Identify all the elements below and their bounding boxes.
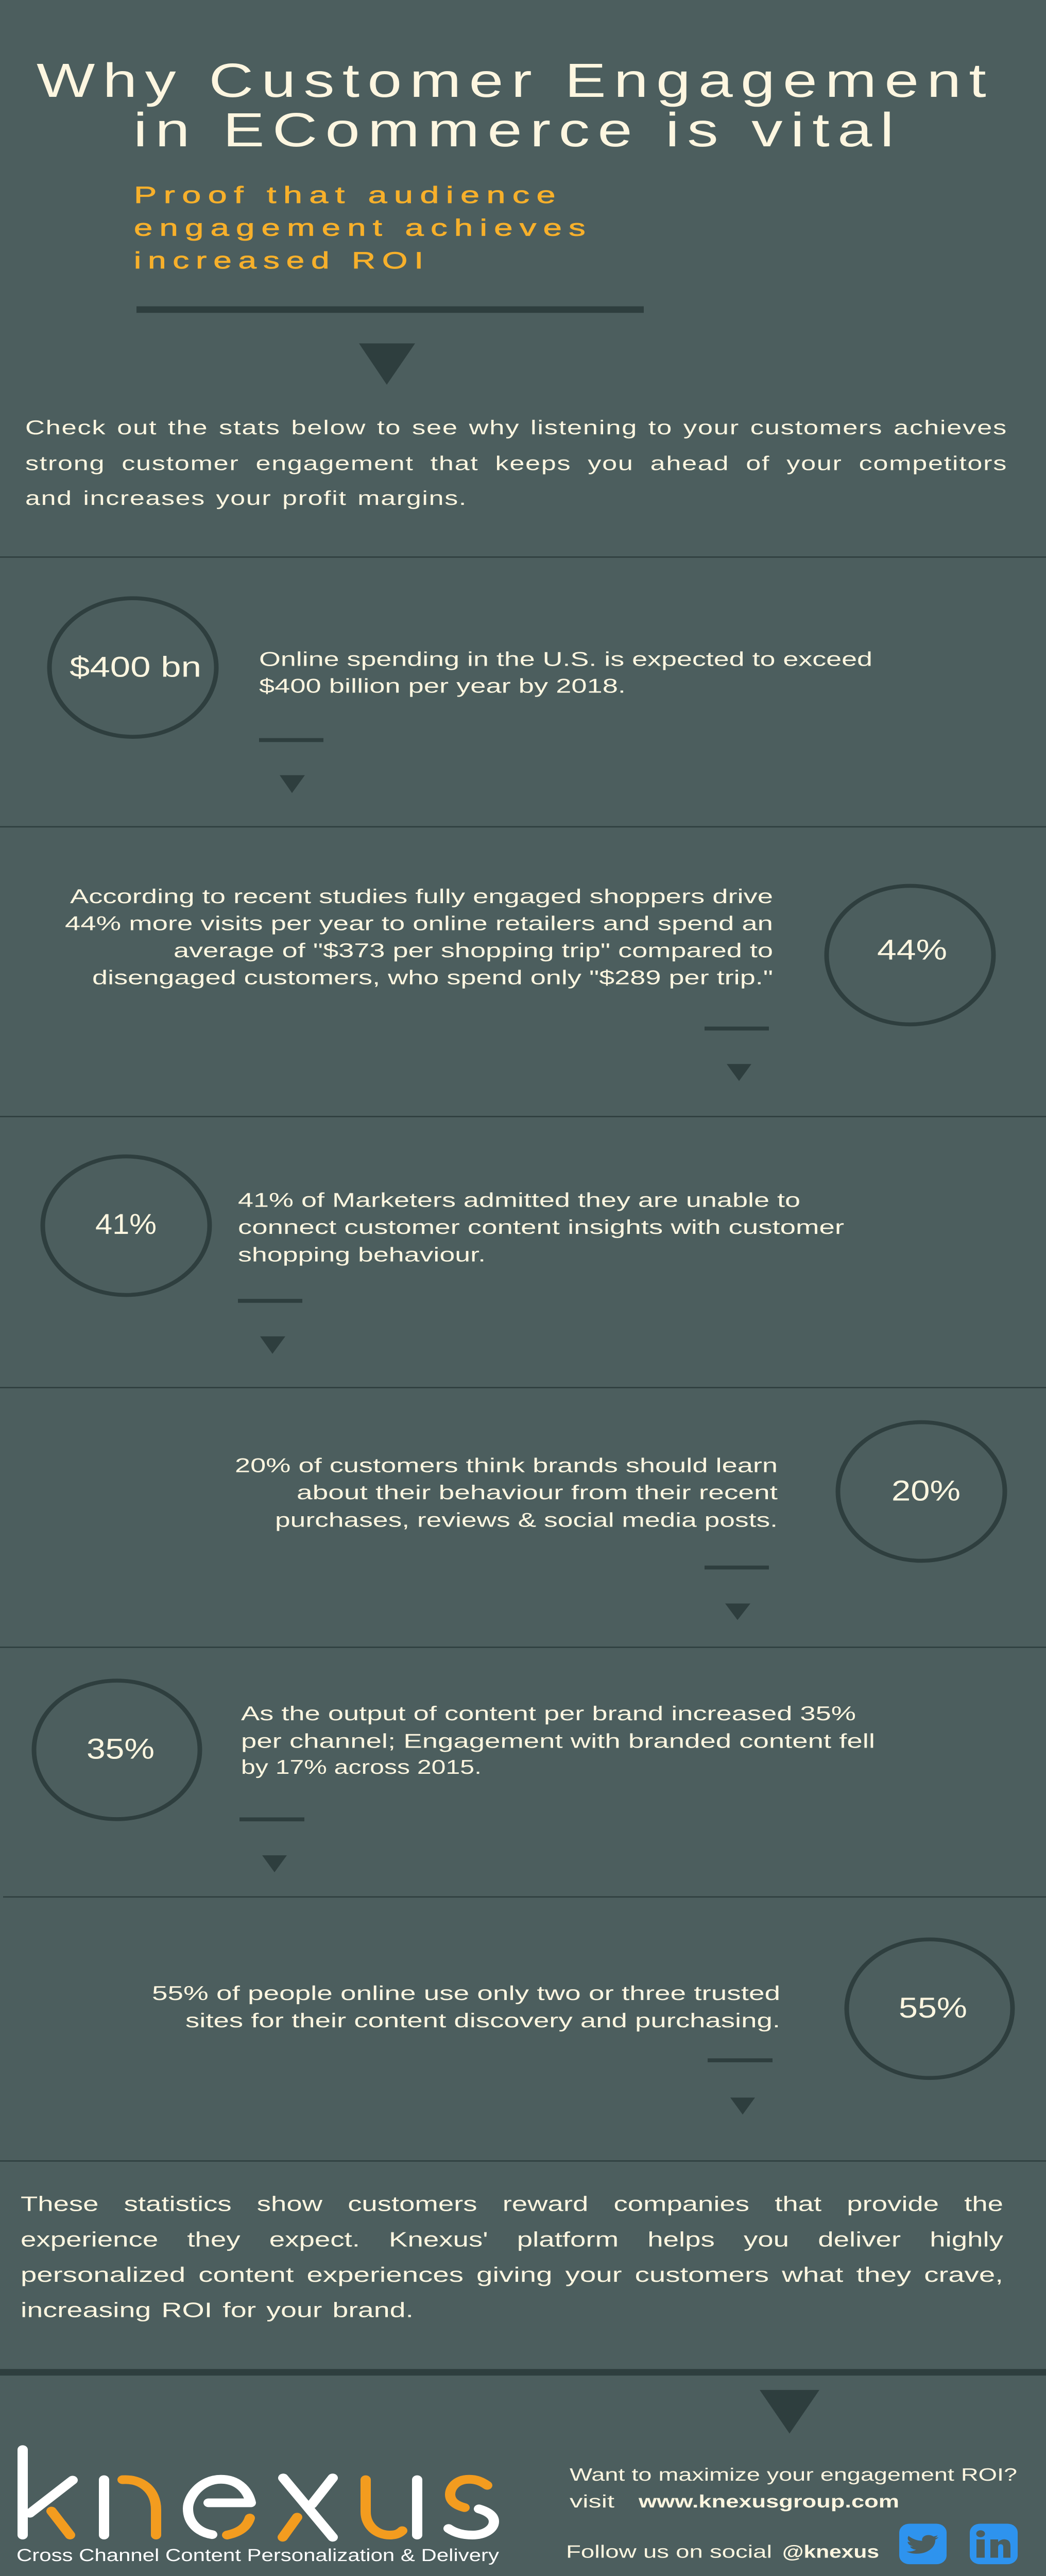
text: brands should learn: 20% of customers think brands should learn	[235, 1454, 778, 1477]
header divider bar	[136, 307, 644, 313]
dash	[239, 1818, 304, 1821]
logo tagline: Cross Channel Content Personalization & Delivery	[16, 2546, 499, 2565]
logo letter u	[366, 2480, 417, 2535]
arrow: down	[262, 1855, 287, 1872]
closing text block: personalized content experiences giving your customers what they crave,	[21, 2264, 1003, 2286]
text: marketers	[238, 1189, 844, 1266]
dash	[259, 738, 323, 742]
circle: 20%	[838, 1422, 1005, 1561]
call to action text: www.knexusgroup.com	[638, 2492, 899, 2512]
text: output of content: by 17% across 2015.	[241, 1755, 482, 1778]
subtitle: engagement achieves	[134, 215, 592, 241]
panel: stat 41%	[43, 1157, 844, 1354]
logo letter n	[104, 2480, 156, 2535]
arrow: down	[260, 1336, 285, 1354]
panel: stat 44%	[65, 885, 993, 1081]
intro text block	[25, 416, 1007, 510]
dash	[705, 1566, 769, 1569]
arrow: down	[725, 1603, 750, 1620]
intro text block: strong customer engagement that keeps you ahead of your competitors	[25, 452, 1007, 474]
logo letter s	[449, 2479, 494, 2535]
arrow: footer triangle	[760, 2390, 819, 2433]
logo letter x	[283, 2478, 333, 2537]
subtitle	[134, 182, 592, 274]
call to action text: visit	[570, 2492, 615, 2512]
text: engaged shoppers: disengaged customers, who spend only "$289 per trip."	[92, 966, 773, 989]
text: trusted sites: sites for their content discovery and purchasing.	[185, 2009, 780, 2032]
dash	[708, 2058, 773, 2062]
panel: stat 55%	[152, 1939, 1013, 2114]
text: brands should learn: about their behaviour from their recent	[297, 1481, 778, 1504]
text: marketers: shopping behaviour.	[238, 1243, 486, 1266]
text: online spending: $400 billion per year by 2018.	[259, 674, 626, 697]
title: in ECommerce is vital	[133, 103, 902, 157]
icon: twitter	[899, 2524, 947, 2564]
text: marketers: connect customer content insights with customer	[238, 1216, 844, 1239]
footer divider bar	[0, 2369, 1046, 2376]
closing text block: These statistics show customers reward companies that provide the	[21, 2193, 1003, 2216]
arrow: down	[280, 775, 305, 793]
call to action text	[570, 2464, 1017, 2512]
closing text block	[21, 2193, 1003, 2322]
arrow: header triangle	[359, 343, 415, 385]
closing text block: increasing ROI for your brand.	[21, 2299, 414, 2322]
subtitle: increased ROI	[134, 247, 430, 274]
text: engaged shoppers: 44% more visits per year to online retailers and spend an	[65, 912, 773, 935]
intro text block: and increases your profit margins.	[25, 487, 467, 510]
circle: 44%	[827, 886, 993, 1024]
text: engaged shoppers: average of "$373 per shopping trip" compared to	[174, 939, 773, 962]
text: output of content	[241, 1702, 875, 1778]
panel: stat $400 bn	[49, 598, 872, 793]
call to action text: Want to maximize your engagement ROI?	[570, 2464, 1017, 2484]
subtitle: Proof that audience	[134, 182, 562, 208]
social follow text: @knexus	[782, 2541, 879, 2562]
arrow: down	[727, 1064, 751, 1081]
logo letter k	[23, 2450, 73, 2535]
social follow text	[566, 2541, 879, 2562]
closing text block: experience they expect. Knexus' platform helps you deliver highly	[21, 2228, 1003, 2251]
logo letter e	[188, 2479, 251, 2535]
circle: 41%: 41%	[95, 1208, 157, 1240]
social follow text: Follow us on social	[566, 2541, 772, 2562]
dash	[705, 1027, 769, 1030]
circle: 55%: 55%	[899, 1991, 967, 2024]
panel: stat 20%	[235, 1422, 1005, 1620]
circle: 55%	[847, 1939, 1013, 2078]
text: output of content: per channel; Engagement with branded content fell	[241, 1730, 875, 1752]
text: online spending: Online spending in the U.S. is expected to exceed	[259, 648, 872, 670]
text: trusted sites: 55% of people online use only two or three trusted	[152, 1981, 780, 2004]
title: Why Customer Engagement	[37, 54, 994, 107]
circle: $400 bn: $400 bn	[70, 651, 201, 683]
intro text block: Check out the stats below to see why listening to your customers achieves	[25, 416, 1007, 439]
arrow: down	[730, 2097, 755, 2114]
text: output of content: As the output of content per brand increased 35%	[241, 1702, 856, 1724]
dash	[238, 1299, 302, 1303]
circle: 20%: 20%	[891, 1475, 961, 1507]
circle: 41%	[43, 1157, 210, 1295]
text: trusted sites	[152, 1981, 780, 2032]
logo: knexus	[16, 2450, 499, 2565]
circle: 35%	[34, 1681, 200, 1819]
text: marketers: 41% of Marketers admitted they are unable to	[238, 1189, 800, 1211]
circle: 44%: 44%	[877, 934, 947, 965]
text: engaged shoppers	[65, 885, 773, 989]
circle: 35%: 35%	[87, 1733, 155, 1765]
text: online spending	[259, 648, 872, 697]
text: engaged shoppers: According to recent studies fully engaged shoppers drive	[70, 885, 773, 908]
panel: stat 35%	[34, 1681, 875, 1872]
title	[37, 54, 994, 157]
text: brands should learn: purchases, reviews & social media posts.	[275, 1509, 778, 1531]
text: brands should learn	[235, 1454, 778, 1531]
icon: linkedin	[970, 2524, 1018, 2564]
circle: $400 bn	[49, 598, 216, 737]
